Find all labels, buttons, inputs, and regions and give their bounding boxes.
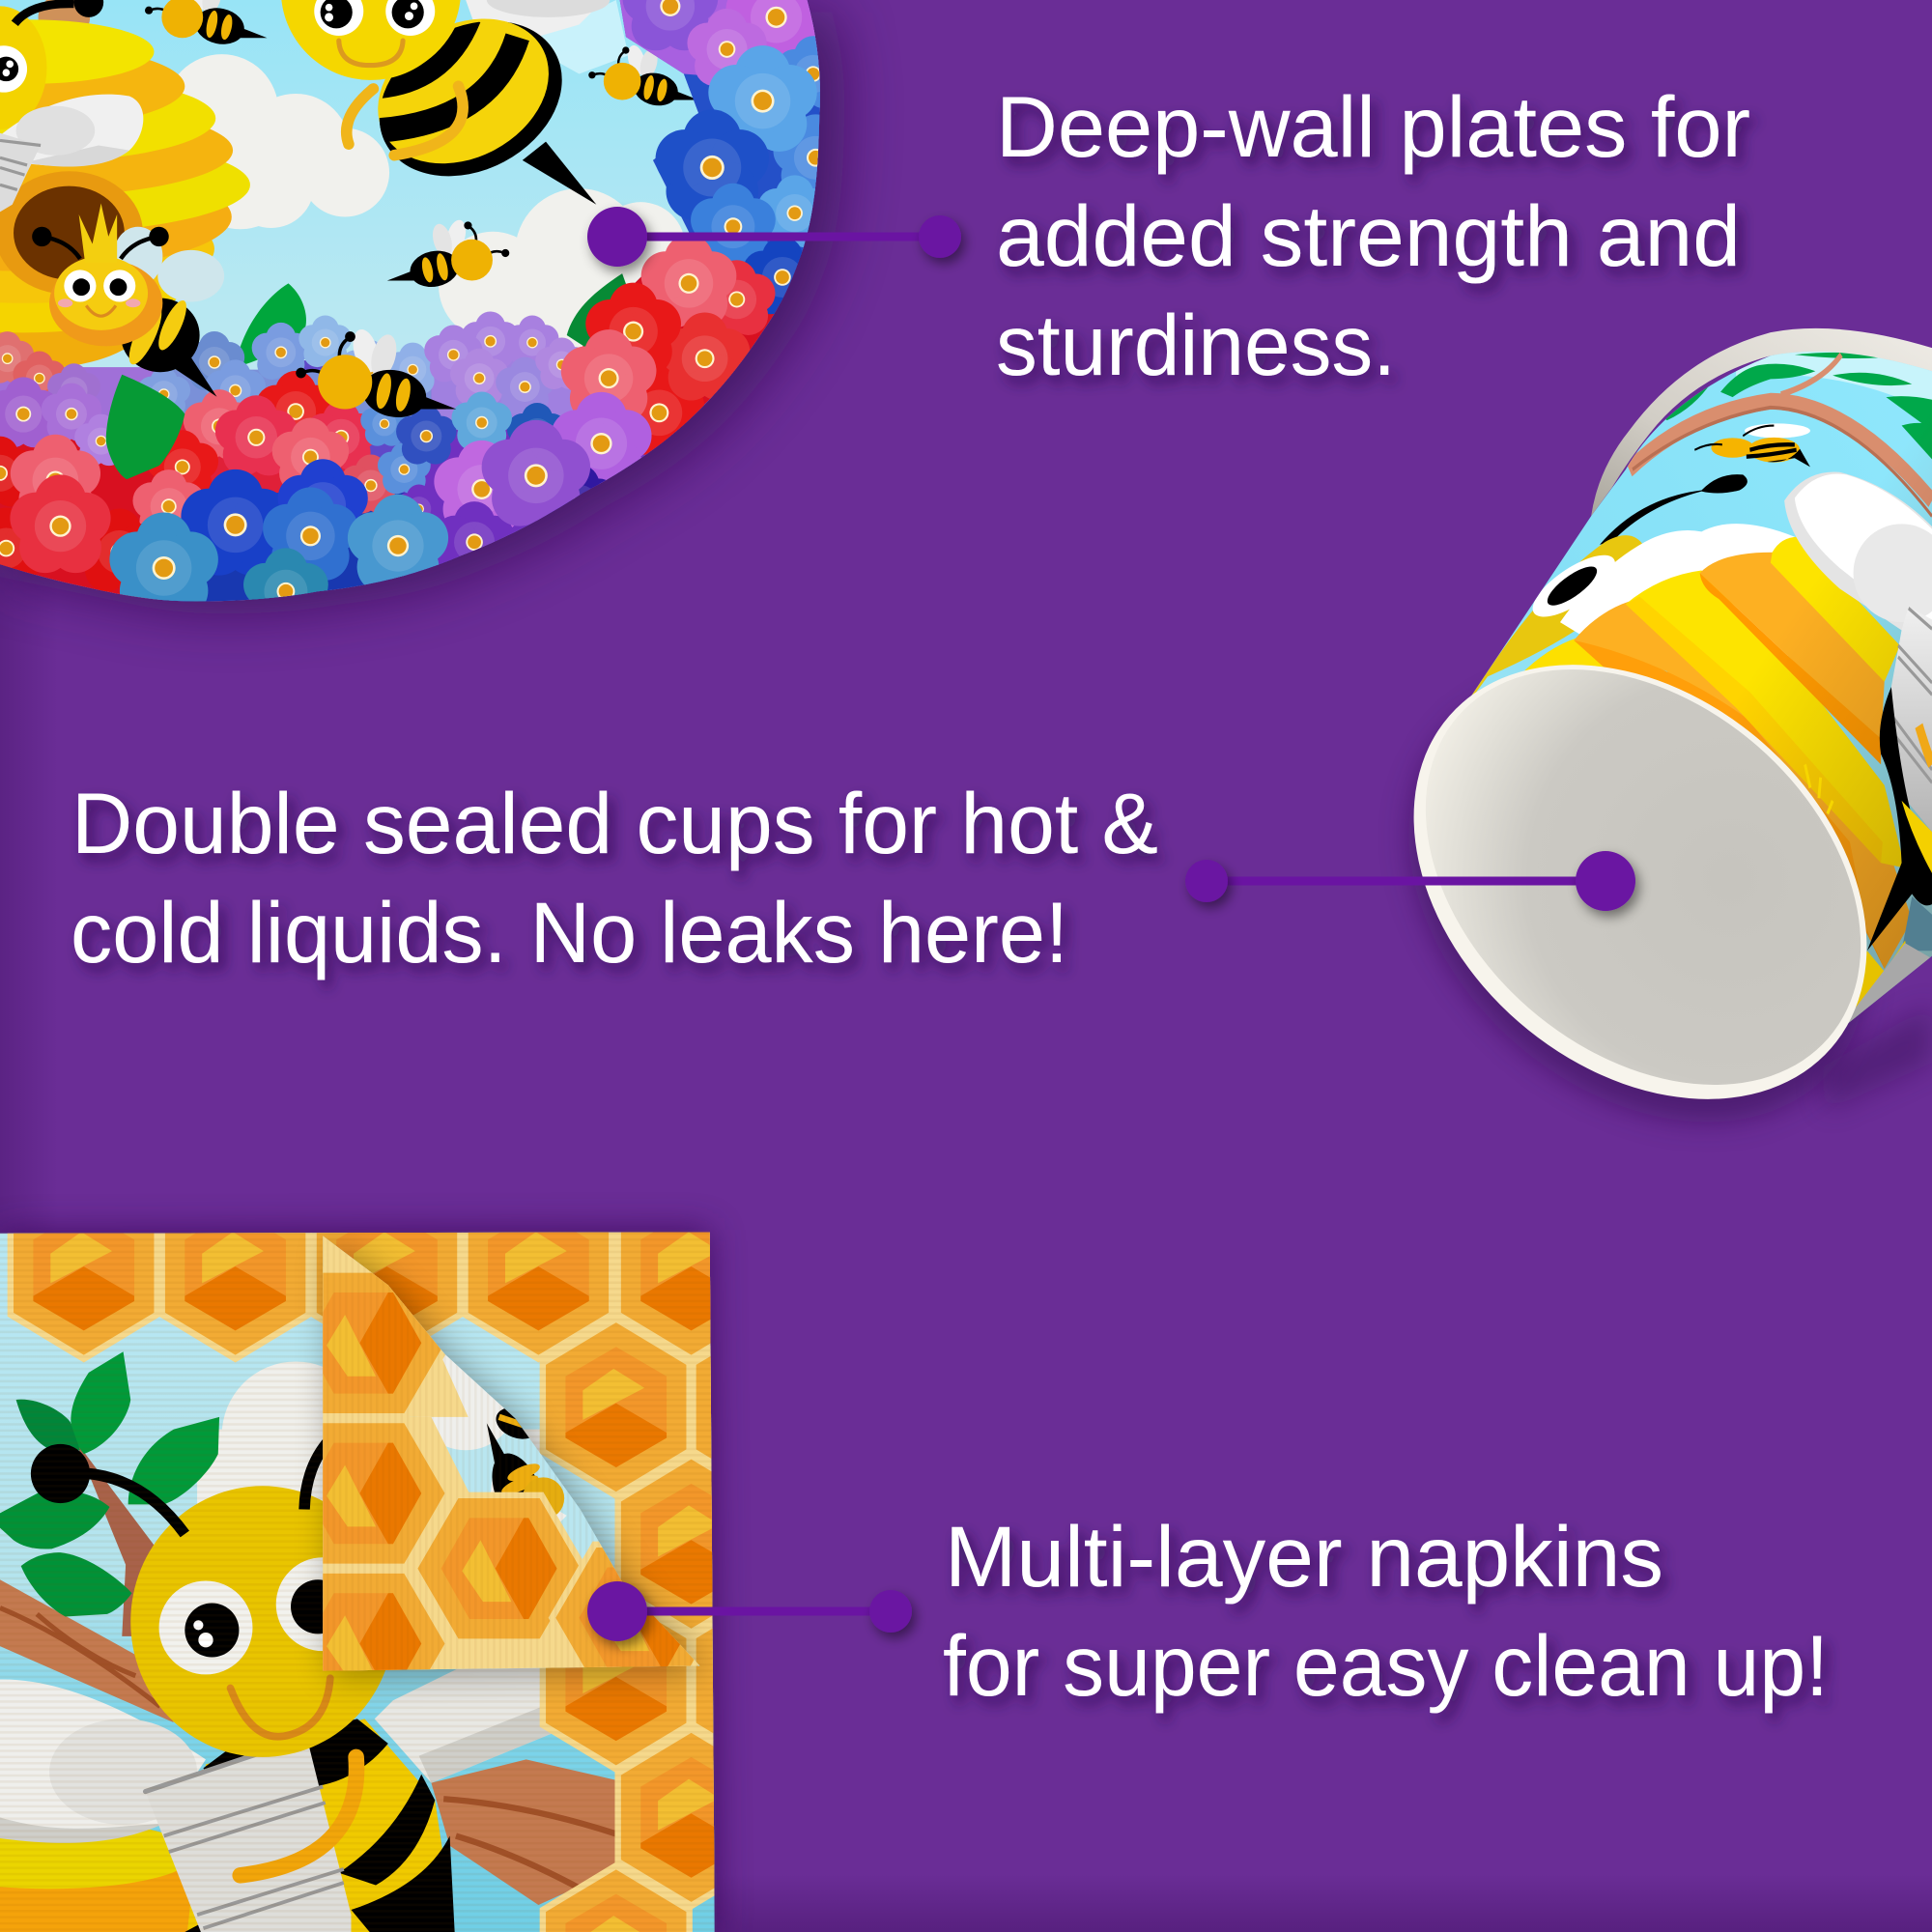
text: napkins (943, 1508, 1829, 1714)
leaves and branch (0, 1351, 629, 1905)
honeycomb pattern (8, 1179, 842, 1932)
folded flap (330, 1240, 707, 1676)
hive bands (1524, 638, 1604, 670)
small bees (145, 0, 268, 48)
text: plates (996, 78, 1750, 393)
product: napkin (0, 1179, 842, 1932)
text: plates: added strength and (996, 187, 1741, 284)
product: paper cup (1400, 328, 1932, 1131)
text: napkins: for super easy clean up! (943, 1617, 1829, 1714)
cup body (1471, 352, 1932, 1024)
big bee (281, 0, 610, 207)
text: napkins: Multi-layer napkins (945, 1508, 1663, 1605)
queen bee (32, 203, 224, 397)
clouds (197, 1331, 542, 1565)
flap bee (482, 1402, 564, 1536)
crown tips (1805, 764, 1833, 813)
callout: napkin leader (587, 1581, 912, 1641)
cloud (1560, 524, 1795, 656)
callout: plate leader (587, 207, 961, 267)
product: bee plate (0, 0, 858, 631)
small bee (1694, 423, 1810, 467)
clouds (178, 54, 683, 348)
flowers (0, 0, 858, 631)
text: plates: sturdiness. (996, 297, 1396, 393)
napkin sky (0, 1233, 727, 1932)
big bee antenna (1600, 474, 1747, 545)
lower bee (296, 327, 456, 423)
held cup (1881, 607, 1932, 832)
napkin bee (0, 1439, 554, 1932)
hive corner (0, 1820, 197, 1932)
wing (1784, 471, 1932, 630)
upper leaf (236, 283, 306, 367)
bee body stripes (1867, 687, 1932, 951)
cup rim (1591, 328, 1932, 516)
flower field base (0, 0, 838, 616)
callout: cup leader (1185, 851, 1635, 911)
hive (0, 0, 250, 370)
bee head (1472, 535, 1642, 696)
cup bottom (1327, 576, 1932, 1188)
text: cups: cold liquids. No leaks here! (71, 884, 1068, 980)
text: cups (71, 775, 1158, 980)
leaf (106, 375, 185, 479)
hive bee (0, 0, 143, 212)
text: plates: Deep-wall plates for (996, 78, 1750, 175)
text: cups: Double sealed cups for hot & (71, 775, 1158, 871)
